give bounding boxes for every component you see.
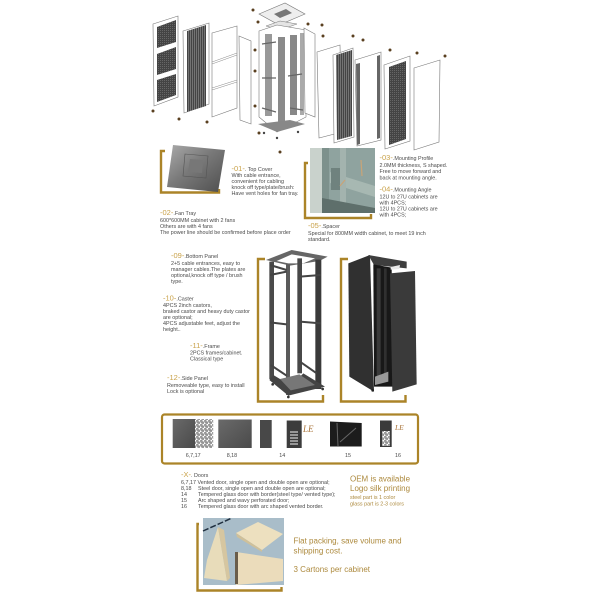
callout: OEM logo printing: Logo silk printing <box>350 484 410 493</box>
panel: top cover: With cable entrance, <box>232 173 281 179</box>
swatch 14: 14 <box>279 453 285 459</box>
text: doors list: 14 <box>181 492 187 498</box>
top cover text: -01-. Top Cover <box>232 164 273 173</box>
logo mark: LE <box>302 424 314 434</box>
text: frame: -11-.Frame <box>190 341 220 350</box>
gold bracket <box>198 524 282 590</box>
text: mounting profile: back at mounting angle. <box>380 176 437 182</box>
glass door <box>317 45 342 138</box>
text: side panel <box>167 373 245 395</box>
text: spacer: standard. <box>308 237 330 243</box>
swatch 15: 15 <box>345 453 351 459</box>
side panel right <box>304 28 315 117</box>
text: mounting angle: 12U to 27U cabinets are <box>380 195 438 201</box>
text: spacer: -05-.Spacer <box>308 221 340 230</box>
panel: top cover <box>161 145 299 197</box>
text: doors list: Arc shaped and wavy perforated door; <box>198 498 290 504</box>
text: fan tray: 600*600MM cabinet with 2 fans <box>160 218 236 224</box>
gold rounded frame <box>162 414 418 464</box>
text: doors list: 8,18 <box>181 486 192 492</box>
text: bottom panel: type. <box>171 279 183 285</box>
cabinet with side panel photo <box>348 255 417 392</box>
text: caster: height.. <box>163 327 181 333</box>
packing text: 3 Cartons per cabinet <box>294 565 371 574</box>
part number markers <box>152 8 446 154</box>
side panel left <box>239 36 251 124</box>
swatch 16: 16 <box>395 453 401 459</box>
text: frame <box>190 341 242 362</box>
panel: top cover: convenient for cabling <box>232 179 284 185</box>
logo mark: LE <box>394 423 404 432</box>
text: mounting angle: with 4PCS; <box>378 212 407 218</box>
text: doors list <box>181 470 336 510</box>
text: caster: are optional; <box>163 315 193 321</box>
arc door with dark perforation <box>333 48 354 143</box>
panel: top cover: knock off type/plate/brush: <box>232 185 294 191</box>
text: doors list: -X-. Doors <box>181 470 209 479</box>
text: mounting profile: 2.0MM thickness, S shaped. <box>380 163 447 169</box>
text: bottom panel: manager cables.The plates are <box>171 267 245 273</box>
gold bracket <box>258 259 323 402</box>
panel: door options <box>162 414 418 464</box>
packing text: Flat packing, save volume and <box>294 536 402 546</box>
vented door <box>384 56 410 149</box>
text: mounting angle <box>378 184 438 218</box>
text: fan tray <box>160 208 291 236</box>
text: bottom panel <box>171 251 245 285</box>
gold bracket <box>305 163 371 218</box>
text: mounting profile: -03-.Mounting Profile <box>380 153 433 162</box>
panel: packing <box>198 518 402 590</box>
swatch 8,18 <box>218 420 252 459</box>
text: spacer <box>308 221 426 243</box>
exploded cabinet diagram <box>152 3 446 154</box>
text: doors list: 15 <box>181 498 187 504</box>
swatch 6,7,17 <box>173 419 213 459</box>
top cover photo <box>167 145 225 192</box>
text: frame: Classical type <box>190 356 223 362</box>
text: bottom panel: optional,knock off type / brush <box>171 273 243 279</box>
text: doors list: 16 <box>181 504 187 510</box>
swatch 6,7,17: 6,7,17 <box>186 453 201 459</box>
frame with top cover <box>258 3 306 139</box>
packing text: shipping cost. <box>294 546 342 556</box>
panel: top cover: Have vent holes for fan tray. <box>232 191 299 197</box>
arc perforated door <box>183 23 209 113</box>
text: frame: 2PCS frames/cabinet. <box>190 350 242 356</box>
packing text <box>294 536 402 574</box>
gold bracket <box>161 151 219 192</box>
text: doors list: Tempered glass door with arc shaped vented border. <box>198 504 324 510</box>
panel: closed cabinet <box>341 255 417 402</box>
text: mounting profile <box>380 153 447 182</box>
text: bottom panel: 2+5 cable entrances, easy to <box>171 261 240 267</box>
swatch 14 <box>260 420 302 459</box>
text: fan tray: -02-.Fan Tray <box>160 208 196 217</box>
triple panel vented door <box>153 16 178 106</box>
text: mounting angle: -04-.Mounting Angle <box>380 184 432 194</box>
text: side panel: Lock is optional <box>167 389 204 395</box>
text: mounting profile: Free to move forward and <box>380 169 441 175</box>
open frame rack photo <box>266 250 328 398</box>
swatch 8,18: 8,18 <box>227 453 237 459</box>
callout: OEM logo printing: OEM is available <box>350 474 411 484</box>
text: caster: 4PCS 2inch castors, <box>163 303 212 309</box>
mounting photo <box>310 148 375 213</box>
callout: OEM logo printing: glass part is 2-3 colors <box>350 502 404 508</box>
text: doors list: Tempered glass door with border(steel type/ vented type); <box>198 492 336 498</box>
steel door left <box>212 26 237 117</box>
text: mounting angle: with 4PCS; <box>378 200 407 206</box>
swatch 16 <box>380 420 401 459</box>
swatch 15 <box>330 422 362 459</box>
text: caster <box>163 294 250 333</box>
text: fan tray: The power line should be confirmed before place order <box>160 230 291 236</box>
panel: open frame <box>258 250 328 402</box>
text: caster: braked castor and heavy duty castor <box>163 309 250 315</box>
text: spacer: Special for 800MM width cabinet, to meet 19 inch <box>308 231 426 237</box>
text: bottom panel: -09-.Bottom Panel <box>171 251 218 260</box>
callout: OEM logo printing: steel part is 1 color <box>350 495 395 501</box>
text: fan tray: Others are with 4 fans <box>160 224 213 230</box>
cartons photo <box>203 518 284 585</box>
text: caster: 4PCS adjustable feet, adjust the <box>163 321 240 327</box>
panel: mounting profile <box>305 148 375 218</box>
text: doors list: Steel door, single open and double open are optional; <box>198 486 326 492</box>
text: caster: -10-.Caster <box>163 294 194 302</box>
gold bracket <box>341 259 406 402</box>
text: doors list: 6,7,17 Vented door, single open and double open are optional; <box>181 480 330 486</box>
text: mounting angle: 12U to 27U cabinets are <box>380 206 438 212</box>
tempered glass door with vented border <box>355 52 381 146</box>
text: side panel: -12-.Side Panel <box>167 373 208 382</box>
plain steel door <box>414 60 440 150</box>
callout: OEM logo printing <box>350 474 411 508</box>
text: side panel: Removeable type, easy to install <box>167 383 245 389</box>
